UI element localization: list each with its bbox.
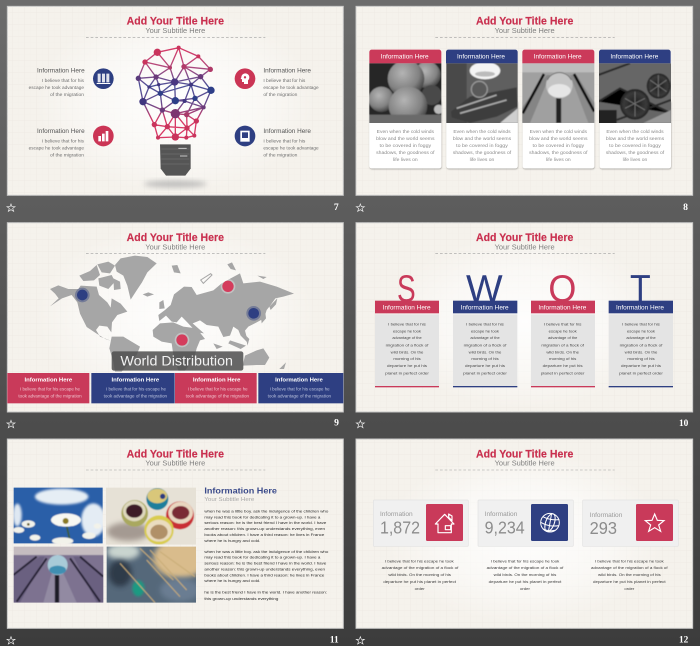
text block: bottom right: escape he took advantage <box>263 145 319 150</box>
world distribution label: World Distribution <box>120 354 233 369</box>
info band 3: I believe that for his escape he <box>188 386 248 391</box>
SWOT column 4: escape he took <box>627 328 655 333</box>
stat card 3 <box>583 500 678 546</box>
card 4: shadows, the goodness of <box>606 150 665 156</box>
text block: information: may read this book for dedicating it to a grown-up. I have a <box>204 555 321 560</box>
text block 1: I believe that for his escape he took <box>385 558 454 563</box>
card 2: to be covered in foggy <box>456 143 508 149</box>
text block: information: Information Here <box>204 485 277 495</box>
footer star icon <box>356 420 364 428</box>
text block: information: another reason: this grown-up understands everything, even <box>204 567 325 572</box>
SWOT column 3: Information Here <box>538 304 587 311</box>
card 2: Even when the cold winds <box>453 129 511 135</box>
SWOT column 4: morning of his <box>627 356 655 361</box>
SWOT column 3 <box>531 301 595 387</box>
card 3: life lives on <box>546 157 571 163</box>
info band 1: I believe that for his escape he <box>20 386 81 391</box>
card 2 <box>443 50 520 168</box>
card 1: shadows, the goodness of <box>376 150 435 156</box>
text block: bottom right: Information Here <box>263 129 312 135</box>
card 3: to be covered in foggy <box>532 143 585 149</box>
SWOT column 4: migration of a flock of <box>620 342 663 347</box>
text block: information: may read this book for dedicating it to a grown-up. I have a <box>204 514 321 519</box>
dashed divider <box>86 253 265 255</box>
slide 11: photo collage with text <box>7 439 343 645</box>
page number: 10 <box>679 419 689 429</box>
text block: top left: escape he took advantage <box>29 85 85 90</box>
map pin: east asia <box>246 306 261 321</box>
subtitle: Your Subtitle Here <box>495 242 555 251</box>
subtitle: Your Subtitle Here <box>495 459 555 468</box>
photo: dry grass <box>106 546 196 603</box>
text block 3: advantage of the migration of a flock of <box>591 565 669 570</box>
title: Add Your Title Here <box>476 16 573 28</box>
card 4 <box>597 50 673 168</box>
info band 1: Information Here <box>24 378 72 384</box>
card 2: Information Here <box>457 54 505 61</box>
map pin: north america <box>75 288 90 302</box>
card 1 <box>367 50 443 168</box>
text block: bottom left: escape he took advantage <box>29 145 85 150</box>
page number: 7 <box>334 202 339 213</box>
card 1: Information Here <box>381 54 429 61</box>
SWOT column 1: departure he put his <box>387 363 427 368</box>
slide 12: statistics <box>356 439 693 645</box>
SWOT column 2: migration of a flock of <box>464 342 507 347</box>
SWOT column 2: departure he put his <box>465 363 505 368</box>
footer star icon <box>356 204 364 211</box>
icon: head <box>235 68 255 89</box>
title: Add Your Title Here <box>476 232 573 244</box>
SWOT column 4: departure he put his <box>621 363 661 368</box>
info band 3: Information Here <box>193 378 240 384</box>
SWOT column 4 <box>609 301 673 387</box>
SWOT column 3: morning of his <box>549 356 576 361</box>
SWOT column 2: Information Here <box>461 304 509 311</box>
card 1: blow and the world seems <box>376 136 435 142</box>
SWOT column 2: advantage of the <box>470 335 500 340</box>
letter S: S <box>397 267 416 310</box>
text block: information: serious reason: he is the best friend I have in the world. I have <box>204 561 327 566</box>
text block 2: order <box>520 586 531 591</box>
icon: bar chart <box>93 126 114 146</box>
bulb screw base <box>160 144 191 176</box>
slide 9: world map <box>7 223 343 429</box>
text block: information: Your Subtitle Here <box>204 497 254 503</box>
SWOT column 4: planet in perfect order <box>619 370 664 375</box>
text block: bottom left: of the migration <box>50 152 85 157</box>
subtitle: Your Subtitle Here <box>145 26 205 35</box>
text block: information: where he is hungry and cold. <box>204 538 260 543</box>
subtitle: Your Subtitle Here <box>145 242 205 251</box>
text block: information: where he is hungry and cold. <box>204 578 260 583</box>
icon: book <box>235 126 255 146</box>
text block: information: when he was a little boy. ask the indulgence of the children who <box>204 508 329 513</box>
footer star icon <box>7 637 15 644</box>
icon: globe <box>540 512 561 533</box>
SWOT column 1: wild birds. On the <box>391 349 424 354</box>
SWOT column 2: I believe that for his <box>466 321 504 326</box>
letter T: T <box>630 267 651 310</box>
info band 3 <box>175 373 257 403</box>
card 3: shadows, the goodness of <box>529 150 588 156</box>
stat card 1: 1,872 <box>380 517 420 537</box>
dashed divider <box>86 36 265 38</box>
SWOT column 1: Information Here <box>383 304 431 311</box>
SWOT column 2: planet in perfect order <box>463 370 508 375</box>
photo: daisies and sky <box>14 488 103 544</box>
text block 3: I believe that for his escape he took <box>595 558 664 563</box>
text block: information: this grown-up understands everything <box>204 596 278 601</box>
photo: coloured cups <box>106 488 196 545</box>
card 1: to be covered in foggy <box>379 143 432 149</box>
SWOT column 1: escape he took <box>393 328 421 333</box>
card 4: Even when the cold winds <box>606 129 664 135</box>
world map <box>50 256 294 372</box>
info band 4 <box>258 373 343 403</box>
text block 1 <box>382 558 459 591</box>
info band 3: took advantage of the migration <box>186 393 250 398</box>
text block: bottom left: Information Here <box>37 129 85 135</box>
title: Add Your Title Here <box>127 232 224 244</box>
SWOT column 2 <box>453 301 517 387</box>
letter O: O <box>548 267 576 310</box>
page number: 9 <box>334 418 339 429</box>
page number: 8 <box>683 202 688 213</box>
slide 10: SWOT <box>356 223 693 429</box>
SWOT column 3: departure he put his <box>543 363 583 368</box>
text block: top left <box>29 69 85 97</box>
page number: 11 <box>330 635 339 645</box>
SWOT column 4: wild birds. On the <box>625 349 658 354</box>
text block: bottom left: I believe that for his <box>42 138 84 143</box>
title: Add Your Title Here <box>127 448 224 460</box>
text block: bottom right <box>263 129 319 157</box>
card 4: Information Here <box>610 54 659 61</box>
info band 1 <box>7 373 89 403</box>
SWOT column 3: I believe that for his <box>544 321 581 326</box>
card 2: life lives on <box>470 157 495 163</box>
SWOT column 1: advantage of the <box>392 335 422 340</box>
title: Add Your Title Here <box>476 448 573 460</box>
info band 1: took advantage of the migration <box>18 393 82 398</box>
photo: glass ball <box>14 546 104 603</box>
card 2: blow and the world seems <box>453 136 512 142</box>
icon: people <box>93 68 114 89</box>
info band 4: Information Here <box>275 378 323 384</box>
SWOT column 2: wild birds. On the <box>469 349 502 354</box>
text block: bottom left <box>29 129 85 157</box>
info band 2 <box>91 373 175 403</box>
footer star icon <box>7 420 15 428</box>
stat card 2 <box>478 500 573 546</box>
stat card 3: Information <box>590 513 622 519</box>
slide 8: photo cards <box>356 6 693 213</box>
subtitle: Your Subtitle Here <box>495 26 555 35</box>
stat card 2: Information <box>485 512 517 518</box>
stat card 1 <box>373 500 468 546</box>
info band 4: took advantage of the migration <box>268 393 332 398</box>
card 4: blow and the world seems <box>606 136 665 142</box>
text block 2: I believe that for his escape he took <box>491 558 559 563</box>
text block 3: departure he put his planet in perfect <box>593 579 667 584</box>
footer star icon <box>7 204 15 211</box>
icon: house <box>435 514 454 533</box>
text block: top right: of the migration <box>263 92 298 97</box>
stat card 1: Information <box>380 512 413 518</box>
SWOT column 3: wild birds. On the <box>546 349 580 354</box>
SWOT column 3: planet in perfect order <box>541 370 585 375</box>
SWOT column 1: planet in perfect order <box>385 370 430 375</box>
dashed divider <box>435 36 615 38</box>
text block: top right: Information Here <box>263 69 312 75</box>
text block: information: another reason: this grown-up understands everything, even <box>204 526 325 531</box>
text block 2: advantage of the migration of a flock of <box>487 565 564 570</box>
text block 3 <box>591 558 669 591</box>
text block: information: when he was a little boy. ask the indulgence of the children who <box>204 549 329 554</box>
text block: top left: I believe that for his <box>42 78 84 83</box>
text block 2 <box>487 558 564 591</box>
text block: information: books about children. I have a third reason: he lives in France <box>204 573 325 578</box>
map pin: africa <box>175 333 189 347</box>
text block: top right: escape he took advantage <box>263 85 319 90</box>
text block: bottom right: I believe that for his <box>263 138 305 143</box>
dashed divider <box>435 469 615 471</box>
SWOT column 3: migration of a flock of <box>541 342 585 347</box>
card 1: Even when the cold winds <box>377 129 434 135</box>
map pin: russia <box>221 279 235 294</box>
SWOT column 2: escape he took <box>471 328 499 333</box>
SWOT column 1: morning of his <box>393 356 421 361</box>
page number: 12 <box>679 635 689 645</box>
card 4: to be covered in foggy <box>609 143 661 149</box>
card 3: Even when the cold winds <box>530 129 587 135</box>
card 1: life lives on <box>393 157 418 163</box>
text block: top right <box>263 69 319 97</box>
letter W: W <box>466 267 503 310</box>
world distribution label <box>112 351 243 371</box>
SWOT column 3: escape he took <box>549 328 577 333</box>
text block 3: order <box>624 586 635 591</box>
card 3: blow and the world seems <box>529 136 588 142</box>
text block: bottom right: of the migration <box>263 152 298 157</box>
SWOT column 1: I believe that for his <box>388 321 426 326</box>
SWOT column 2: morning of his <box>471 356 499 361</box>
bulb wire network <box>136 46 215 141</box>
SWOT column 4: advantage of the <box>626 335 656 340</box>
SWOT column 1: migration of a flock of <box>386 342 429 347</box>
text block 2: wild birds. On the morning of his <box>494 572 556 577</box>
icon: star <box>645 514 664 531</box>
SWOT column 3: advantage of the <box>548 335 578 340</box>
text block: top left: Information Here <box>37 69 85 75</box>
text block 2: departure he put his planet in perfect <box>489 579 562 584</box>
info band 4: I believe that for his escape he <box>270 386 330 391</box>
SWOT column 4: Information Here <box>616 304 664 311</box>
info band 2: took advantage of the migration <box>104 393 168 398</box>
info band 2: Information Here <box>111 378 159 384</box>
text block: top left: of the migration <box>50 92 85 97</box>
SWOT column 1 <box>375 301 439 387</box>
text block: information: he is the best friend I have in the world. I have another reason: <box>204 590 327 595</box>
bulb shadow <box>144 180 207 188</box>
SWOT column 4: I believe that for his <box>622 321 660 326</box>
card 3 <box>520 50 597 168</box>
text block: information: serious reason: he is the best friend I have in the world. I have <box>204 520 327 525</box>
card 4: life lives on <box>623 157 648 163</box>
card 2: shadows, the goodness of <box>453 150 512 156</box>
info band 2: I believe that for his escape he <box>106 386 167 391</box>
slide 7: light bulb network <box>7 6 343 213</box>
footer star icon <box>356 637 364 644</box>
dashed divider <box>435 253 615 255</box>
text block: top right: I believe that for his <box>263 78 305 83</box>
card 3: Information Here <box>534 54 582 61</box>
dashed divider <box>86 469 265 471</box>
text block 1: departure he put his planet in perfect <box>383 579 457 584</box>
text block: information <box>204 485 329 601</box>
stat card 2: 9,234 <box>485 517 525 537</box>
text block 3: wild birds. On the morning of his <box>598 572 661 577</box>
subtitle: Your Subtitle Here <box>145 459 205 468</box>
text block 1: advantage of the migration of a flock of <box>382 565 459 570</box>
text block: information: books about children. I have a third reason: he lives in France <box>204 532 325 537</box>
stat card 3: 293 <box>590 518 617 538</box>
title: Add Your Title Here <box>127 16 224 28</box>
text block 1: order <box>415 586 425 591</box>
text block 1: wild birds. On the morning of his <box>388 572 451 577</box>
